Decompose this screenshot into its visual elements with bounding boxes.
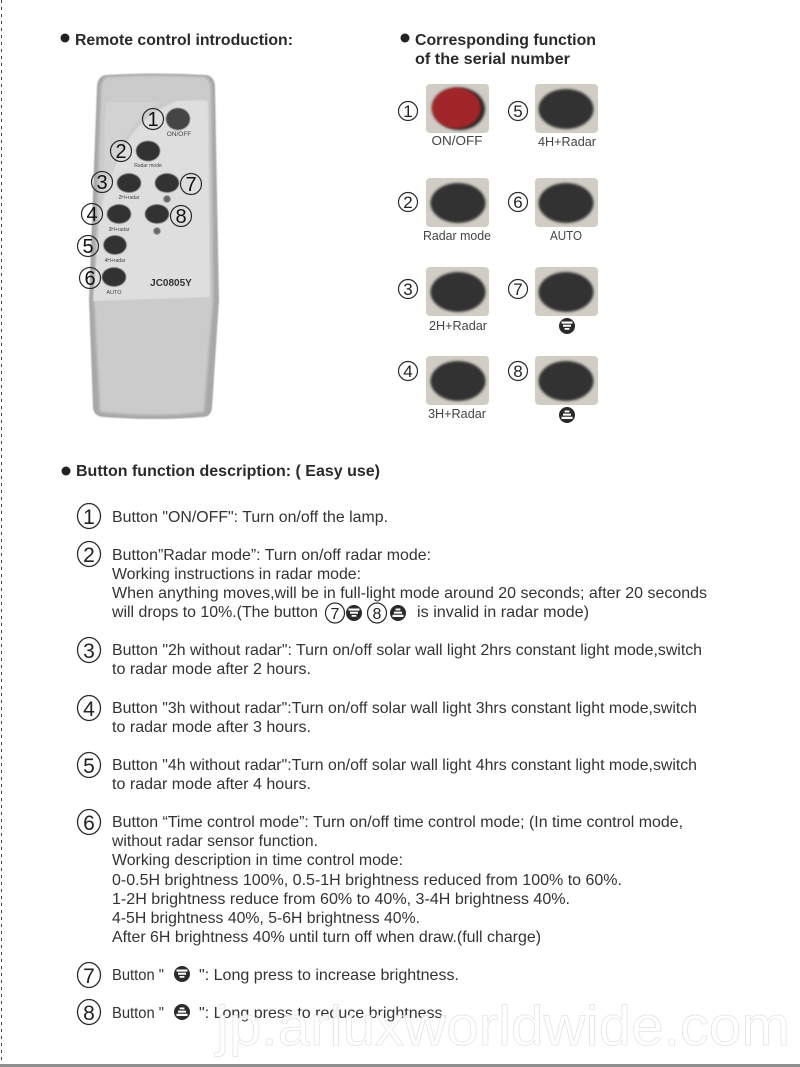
description 2: 8 <box>373 606 382 623</box>
description 6: Working description in time control mode: <box>112 852 403 869</box>
serial numbers on remote: 1 <box>147 109 159 131</box>
description 3: to radar mode after 2 hours. <box>112 661 311 678</box>
description 4: 4 <box>83 698 95 721</box>
button tile 8: brightness up: 8 <box>513 362 523 381</box>
button tile 5: 4H+Radar <box>508 84 598 149</box>
serial numbers on remote: 6 <box>84 268 96 290</box>
description 6: 4-5H brightness 40%, 5-6H brightness 40%. <box>112 910 420 927</box>
bottom bar <box>0 1064 800 1067</box>
button tile 3: 2H+Radar: 3 <box>403 280 413 299</box>
description 2: is invalid in radar mode) <box>417 604 589 621</box>
heading: remote control introduction: Remote control introduction: <box>75 32 293 49</box>
button tile 1: ON/OFF <box>398 84 489 148</box>
button captions on remote: JC0805Y <box>150 278 192 289</box>
button tile 5: 4H+Radar: 5 <box>513 102 523 121</box>
button tile 3: 2H+Radar <box>398 267 489 333</box>
description 4: Button "3h without radar":Turn on/off solar wall light 3hrs constant light mode,switch <box>112 700 697 717</box>
button captions on remote: 4H+radar <box>105 258 126 264</box>
description 7 <box>78 962 459 988</box>
button captions on remote <box>105 131 192 296</box>
description 8: 8 <box>83 1002 95 1025</box>
description 2: Working instructions in radar mode: <box>112 566 361 583</box>
button tile 6: AUTO: AUTO <box>550 229 582 243</box>
button captions on remote: AUTO <box>106 290 122 296</box>
description 6: Button “Time control mode”: Turn on/off time control mode; (In time control mode, <box>112 814 683 831</box>
description 4 <box>78 696 697 736</box>
button tile 7: brightness down <box>508 267 598 334</box>
description 8: ": Long press to reduce brightness. <box>199 1005 447 1022</box>
button tile 1: ON/OFF: 1 <box>403 102 413 121</box>
heading: corresponding function: Corresponding function <box>415 32 596 49</box>
description 5 <box>78 752 697 793</box>
buttons on remote <box>102 108 190 286</box>
heading: corresponding function: of the serial number <box>415 51 570 68</box>
heading: corresponding function <box>400 32 596 68</box>
serial numbers on remote: 7 <box>185 174 197 196</box>
description 2: 2 <box>83 544 95 567</box>
description 2 <box>78 542 707 623</box>
description 4: to radar mode after 3 hours. <box>112 719 311 736</box>
description 7: ": Long press to increase brightness. <box>199 967 459 984</box>
watermark: jp.arluxworldwide.com <box>214 994 790 1057</box>
description 8 <box>78 1000 447 1025</box>
description 6: After 6H brightness 40% until turn off when draw.(full charge) <box>112 929 541 946</box>
button tile 2: Radar mode <box>398 178 491 243</box>
button tile 3: 2H+Radar: 2H+Radar <box>429 319 487 333</box>
button tile 5: 4H+Radar: 4H+Radar <box>538 135 596 149</box>
button tile 4: 3H+Radar: 3H+Radar <box>428 407 486 421</box>
description 6: without radar sensor function. <box>111 833 318 850</box>
serial numbers on remote <box>78 108 202 290</box>
description 7: Button " <box>112 967 164 984</box>
description 2: When anything moves,will be in full-light mode around 20 seconds; after 20 seconds <box>112 585 707 602</box>
left dashed border <box>0 0 2 1067</box>
button tile 1: ON/OFF: ON/OFF <box>432 134 483 148</box>
button tile 4: 3H+Radar: 4 <box>403 362 413 381</box>
description 5: to radar mode after 4 hours. <box>112 776 311 793</box>
button tile 2: Radar mode: 2 <box>403 193 413 212</box>
button tile 6: AUTO: 6 <box>513 193 523 212</box>
description 1: Button "ON/OFF": Turn on/off the lamp. <box>112 509 388 526</box>
description 3: 3 <box>83 640 95 663</box>
description 3: Button "2h without radar": Turn on/off solar wall light 2hrs constant light mode,switch <box>112 642 702 659</box>
description 6: 0-0.5H brightness 100%, 0.5-1H brightness reduced from 100% to 60%. <box>112 872 622 889</box>
remote control illustration <box>78 74 219 419</box>
button captions on remote: 2H+radar <box>119 195 140 201</box>
serial numbers on remote: 8 <box>175 206 187 228</box>
description 2: 7 <box>331 606 340 623</box>
description 8: Button " <box>112 1005 164 1022</box>
description 7: 7 <box>83 965 95 988</box>
description 1: 1 <box>83 506 95 529</box>
button captions on remote: 3H+radar <box>109 227 130 233</box>
button tile 7: brightness down: 7 <box>513 280 523 299</box>
button captions on remote: Radar mode <box>134 163 162 169</box>
serial numbers on remote: 2 <box>115 141 127 163</box>
button tile 2: Radar mode: Radar mode <box>423 229 491 243</box>
button tile 6: AUTO <box>508 178 598 243</box>
description 1 <box>78 504 388 529</box>
button tile 4: 3H+Radar <box>398 356 489 421</box>
button captions on remote: ON/OFF <box>167 131 191 138</box>
serial numbers on remote: 5 <box>82 236 94 258</box>
description 5: 5 <box>83 755 95 778</box>
description 3 <box>78 638 702 678</box>
button tile 8: brightness up <box>508 356 598 423</box>
heading: button function description: Button function description: ( Easy use) <box>76 463 380 480</box>
description 2: Button”Radar mode”: Turn on/off radar mode: <box>112 547 431 564</box>
serial numbers on remote: 3 <box>96 172 108 194</box>
serial numbers on remote: 4 <box>86 204 98 226</box>
description 2: will drops to 10%.(The button <box>111 604 318 621</box>
description 6: 1-2H brightness reduce from 60% to 40%, 3-4H brightness 40%. <box>112 891 570 908</box>
description 6 <box>78 810 683 946</box>
description 6: 6 <box>83 812 95 835</box>
description 5: Button "4h without radar":Turn on/off solar wall light 4hrs constant light mode,switch <box>112 757 697 774</box>
